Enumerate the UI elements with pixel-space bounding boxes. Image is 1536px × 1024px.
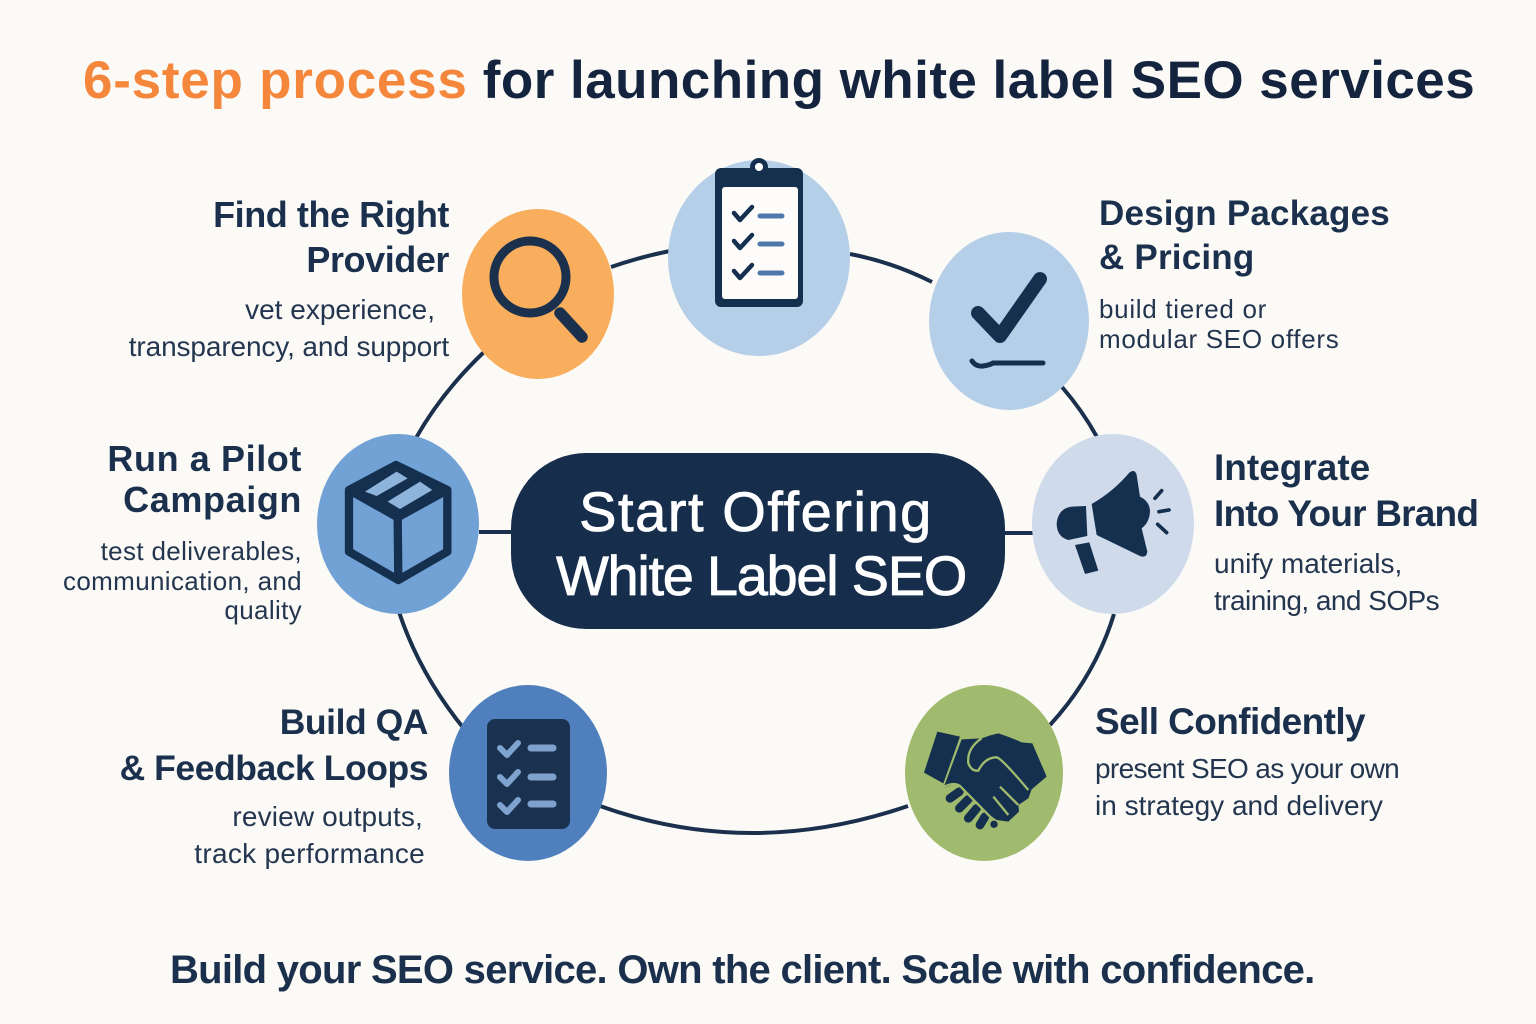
step: design packages: modular SEO offers <box>1099 324 1339 354</box>
step: sell confidently: present SEO as your own <box>1095 753 1399 784</box>
step: run a pilot: test deliverables, <box>101 536 302 566</box>
icon: checkmark <box>929 232 1089 410</box>
step: design packages: & Pricing <box>1099 238 1254 277</box>
step: sell confidently: Sell Confidently <box>1095 701 1365 742</box>
step: integrate: unify materials, <box>1214 548 1402 579</box>
step: design packages <box>1099 194 1390 354</box>
title: 6-step process for launching white label SEO services <box>83 51 1475 110</box>
step: run a pilot: Campaign <box>123 479 302 520</box>
step: build qa: review outputs, <box>232 801 423 832</box>
connecting ring <box>399 251 1114 833</box>
center pill label: Start Offering <box>579 480 933 543</box>
icon: checklist <box>449 685 607 861</box>
step: build qa: Build QA <box>280 702 428 742</box>
step: design packages: build tiered or <box>1099 294 1267 324</box>
step: design packages: Design Packages <box>1099 194 1390 233</box>
step: integrate: Into Your Brand <box>1214 493 1478 534</box>
icon: clipboard <box>668 160 850 356</box>
step: find the right provider <box>129 194 449 362</box>
step: sell confidently: in strategy and delivery <box>1095 790 1383 821</box>
icon: handshake <box>905 685 1063 861</box>
step: integrate: training, and SOPs <box>1214 585 1439 616</box>
step: sell confidently <box>1095 701 1399 821</box>
center pill label <box>556 480 966 607</box>
tagline: Build your SEO service. Own the client. Scale with confidence. <box>170 948 1315 992</box>
step: find the right provider: Find the Right <box>213 194 449 235</box>
icon: magnifier <box>462 209 614 379</box>
step: build qa: track performance <box>194 838 425 869</box>
step: build qa: & Feedback Loops <box>120 748 428 788</box>
step: find the right provider: transparency, and support <box>129 331 449 362</box>
step: run a pilot: communication, and <box>63 566 302 596</box>
icon: megaphone <box>1032 434 1194 614</box>
step: run a pilot: Run a Pilot <box>107 438 302 479</box>
step: integrate <box>1214 447 1478 616</box>
step: find the right provider: Provider <box>306 239 449 280</box>
step: build qa <box>120 702 428 869</box>
center pill label: White Label SEO <box>556 544 966 607</box>
step: run a pilot: quality <box>224 595 302 625</box>
step: integrate: Integrate <box>1214 447 1370 488</box>
step: find the right provider: vet experience, <box>245 294 435 325</box>
icon: box <box>317 434 479 614</box>
center pill <box>511 453 1005 629</box>
step: run a pilot <box>63 438 302 625</box>
